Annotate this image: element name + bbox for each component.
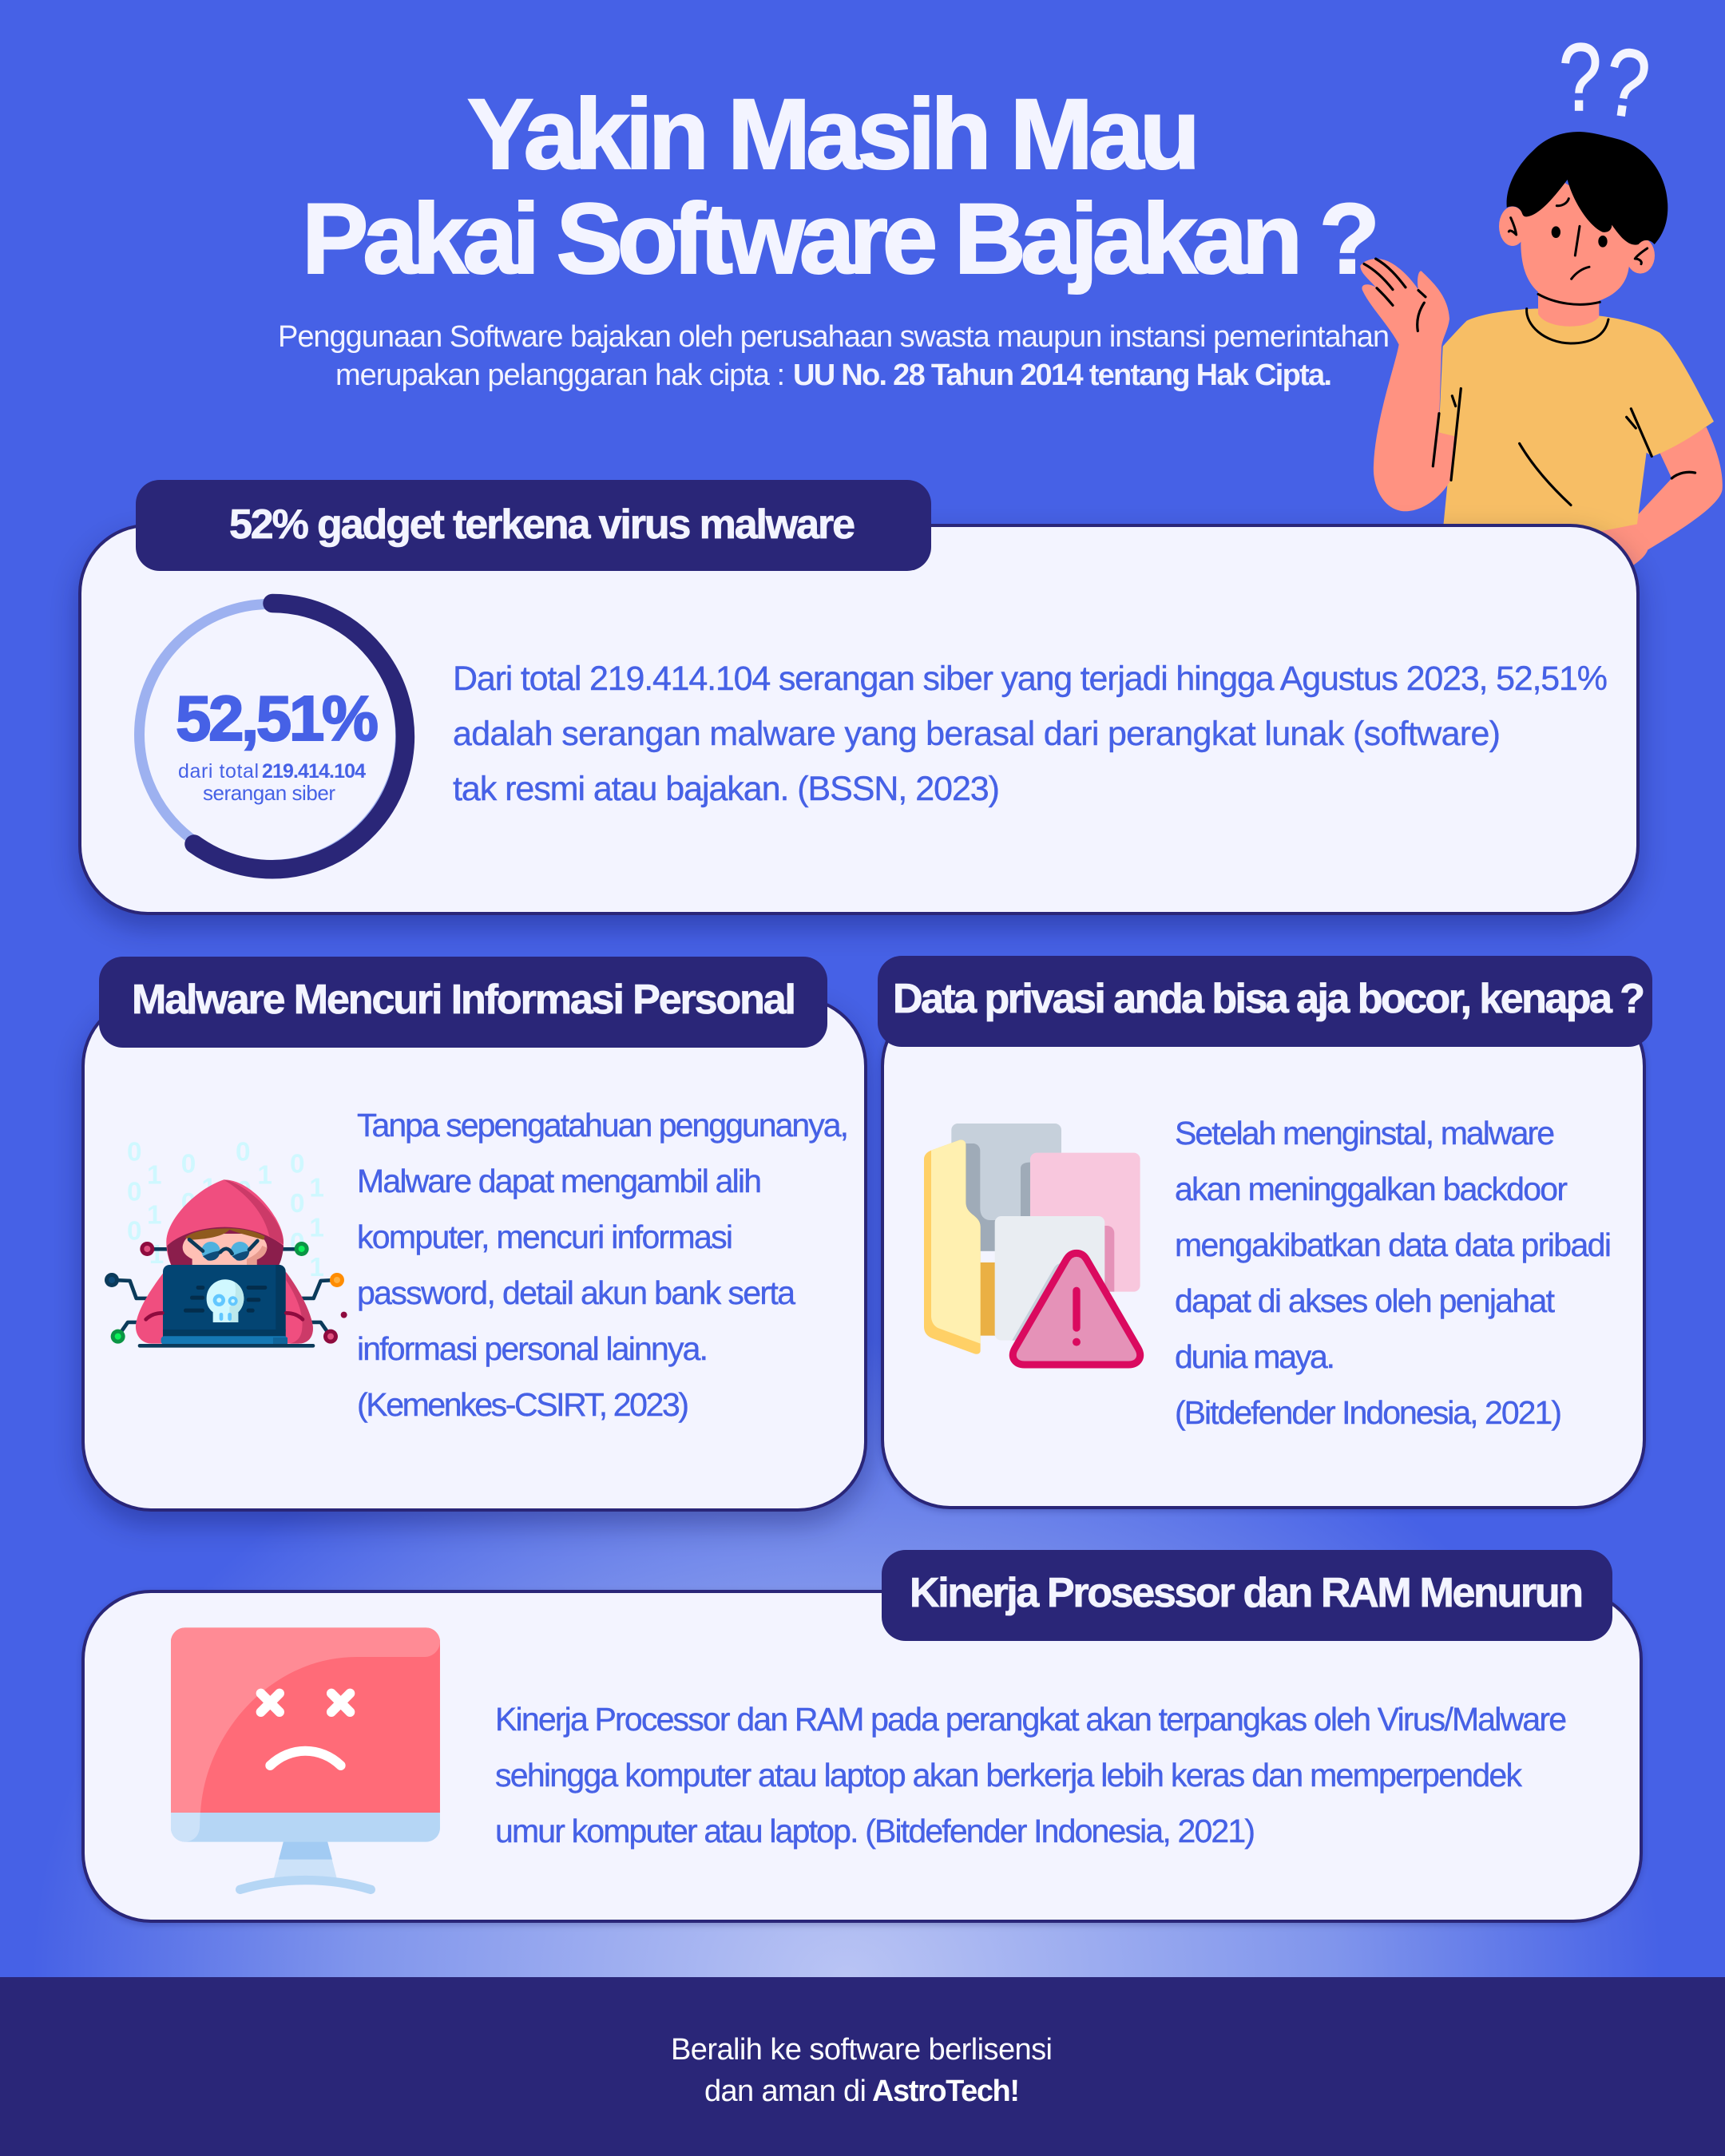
body text: Tanpa sepengatahuan penggunanya, (357, 1107, 849, 1143)
heading pill: Kinerja Prosessor dan RAM Menurun (910, 1570, 1584, 1616)
laptop (138, 1265, 315, 1348)
sleeve creases (146, 1313, 303, 1319)
monitor bezel (171, 1813, 440, 1842)
body text: umur komputer atau laptop. (Bitdefender Indonesia, 2021) (495, 1813, 1255, 1849)
character hair (1507, 132, 1668, 245)
hood inner (167, 1227, 284, 1272)
body text: (Bitdefender Indonesia, 2021) (1175, 1394, 1562, 1431)
donut chart 52,51%: serangan siber (203, 781, 335, 805)
character facial lines (1509, 199, 1648, 304)
character right arm (1600, 427, 1723, 566)
question marks: ? (1559, 25, 1601, 132)
circuit lines (112, 1249, 337, 1337)
body text: tak resmi atau bajakan. (BSSN, 2023) (453, 770, 1000, 808)
footer: Beralih ke software berlisensi (671, 2033, 1053, 2067)
body text (495, 1701, 1567, 1849)
heading pill: Malware Mencuri Informasi Personal (132, 977, 796, 1023)
sad face (261, 1694, 350, 1766)
body text: Setelah menginstal, malware (1175, 1115, 1555, 1151)
donut chart 52,51%: dari total (178, 760, 259, 783)
hoodie body (136, 1272, 313, 1344)
title: Pakai Software Bajakan ? (302, 184, 1380, 295)
binary digits: 0 (127, 1178, 142, 1207)
body text: mengakibatkan data data pribadi (1175, 1227, 1612, 1263)
subtitle: merupakan pelanggaran hak cipta : (335, 359, 785, 392)
body text: adalah serangan malware yang berasal dari perangkat lunak (software) (453, 715, 1501, 753)
heading pill (882, 1550, 1612, 1641)
character raised arm and hand (1360, 259, 1455, 511)
body text (1175, 1115, 1612, 1431)
binary digits: 0 (127, 1138, 142, 1167)
donut chart 52,51%: 219.414.104 (262, 760, 366, 783)
heading pill (136, 480, 931, 571)
donut chart 52,51%: 52,51% (176, 683, 379, 754)
body text (453, 660, 1608, 808)
character face (1521, 178, 1637, 303)
yellow back (980, 1262, 999, 1336)
body text: komputer, mencuri informasi (357, 1219, 733, 1255)
binary digits: 0 (290, 1228, 305, 1258)
binary digits: 0 (290, 1189, 305, 1219)
panel card (80, 525, 1638, 914)
panel: private data can leak (878, 956, 1652, 1508)
binary digits: 0 (181, 1150, 196, 1179)
subtitle (278, 320, 1390, 392)
subtitle: UU No. 28 Tahun 2014 tentang Hak Cipta. (793, 359, 1332, 392)
glasses (189, 1239, 257, 1261)
stand (274, 1841, 337, 1879)
grey folder (951, 1124, 1061, 1251)
body text: dapat di akses oleh penjahat (1175, 1282, 1556, 1319)
pink folder (1030, 1153, 1140, 1292)
icon: folders with warning (924, 1124, 1140, 1365)
binary digits: 1 (147, 1161, 162, 1191)
icon: sad monitor (171, 1627, 440, 1889)
panel: 52% malware stat (80, 480, 1638, 914)
panel: CPU and RAM performance (83, 1550, 1641, 1921)
circuit nodes (105, 1242, 347, 1344)
title: Yakin Masih Mau (467, 79, 1200, 190)
donut chart 52,51% (139, 604, 405, 870)
character shirt (1439, 308, 1714, 532)
title (302, 79, 1380, 295)
character collar (1527, 309, 1608, 343)
hood (166, 1179, 284, 1272)
body text: Kinerja Processor dan RAM pada perangkat akan terpangkas oleh Virus/Malware (495, 1701, 1567, 1738)
face (183, 1234, 267, 1265)
binary digits: 0 (236, 1176, 252, 1206)
exclamation mark (1073, 1287, 1081, 1346)
body text: informasi personal lainnya. (357, 1330, 708, 1367)
binary digits: 1 (309, 1253, 324, 1282)
body text: dunia maya. (1175, 1338, 1335, 1375)
body text: Dari total 219.414.104 serangan siber yang terjadi hingga Agustus 2023, 52,51% (453, 660, 1608, 698)
heading pill (878, 956, 1652, 1047)
binary digits: 1 (147, 1201, 162, 1231)
white sheet (995, 1216, 1104, 1341)
heading pill: 52% gadget terkena virus malware (229, 501, 855, 548)
body text: sehingga komputer atau laptop akan berkerja lebih keras dan memperpendek (495, 1757, 1522, 1793)
hair (185, 1228, 265, 1240)
panel card (882, 998, 1644, 1508)
footer (0, 1977, 1725, 2156)
binary digits: 1 (309, 1214, 324, 1243)
heading pill: Data privasi anda bisa aja bocor, kenapa ? (893, 976, 1645, 1022)
panel card (83, 1591, 1641, 1921)
character head (1499, 132, 1668, 343)
monitor screen (171, 1627, 440, 1813)
footer: AstroTech! (872, 2075, 1020, 2108)
binary digits: 0 (127, 1217, 142, 1246)
binary digits: 1 (257, 1161, 272, 1191)
question marks (1559, 25, 1656, 140)
panel: malware steals personal info (83, 957, 866, 1510)
subtitle: Penggunaan Software bajakan oleh perusahaan swasta maupun instansi pemerintahan (278, 320, 1390, 354)
binary digits: 0 (290, 1150, 305, 1179)
panel card (83, 998, 866, 1510)
skull (207, 1279, 244, 1322)
yellow flap (924, 1139, 981, 1354)
warning triangle (1013, 1253, 1140, 1365)
body text: Malware dapat mengambil alih (357, 1163, 762, 1199)
heading pill (99, 957, 827, 1048)
character body and arms (1360, 259, 1723, 566)
character eyes (1552, 226, 1608, 248)
character ears (1499, 207, 1655, 274)
body text: (Kemenkes-CSIRT, 2023) (357, 1386, 689, 1423)
binary digits: 1 (149, 1240, 164, 1270)
footer: dan aman di (704, 2075, 866, 2108)
character line details (1364, 259, 1695, 505)
icon: hacker (105, 1138, 347, 1348)
body text (357, 1107, 849, 1423)
binary digits: 0 (181, 1188, 196, 1218)
body text: akan meninggalkan backdoor (1175, 1171, 1568, 1207)
binary digits: 1 (201, 1174, 216, 1203)
question marks: ? (1598, 28, 1656, 140)
binary digits: 1 (309, 1174, 324, 1203)
binary digits (127, 1138, 324, 1282)
body text: password, detail akun bank serta (357, 1274, 795, 1311)
laptop text lines (184, 1286, 267, 1313)
character: confused man (1360, 25, 1723, 566)
binary digits: 0 (236, 1138, 251, 1167)
character neck (1538, 290, 1599, 327)
